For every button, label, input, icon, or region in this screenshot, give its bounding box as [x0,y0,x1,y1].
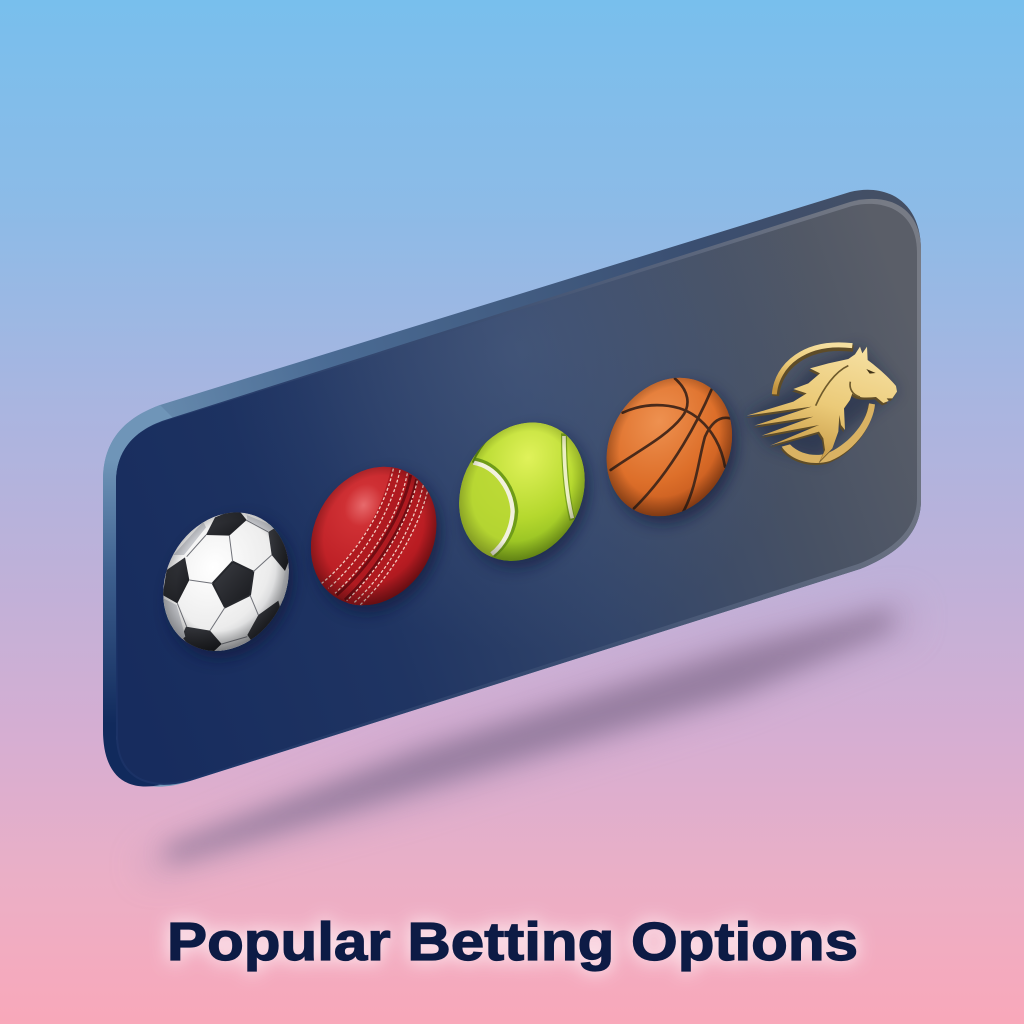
icon: soccer ball [163,512,296,662]
panel face outer highlight [116,199,921,785]
emblem horse eye [866,369,876,374]
tennis ball body [459,422,585,561]
panel left edge [103,405,175,787]
cricket ball body [310,466,436,606]
icon: basketball [606,367,737,534]
panel face sheen [116,204,917,783]
panel cast shadow [140,600,910,875]
emblem horse [747,347,897,461]
panel edge [103,190,921,787]
basketball body [606,378,732,516]
panel: tilted navy board [103,190,921,787]
cricket shadow [315,463,441,623]
soccer shadow [168,509,294,669]
icon: cricket ball [311,456,441,623]
emblem ring bottom [781,405,874,465]
emblem shadow [747,347,897,461]
emblem horse shadow [745,349,896,463]
emblem creases [816,366,860,406]
title glow: Popular Betting Options [167,912,858,972]
icon: tennis ball [454,412,590,579]
soccer ball body [163,512,289,651]
title: Popular Betting Options [167,912,858,972]
panel face [116,204,917,783]
emblem ring top [776,347,853,396]
basketball shadow [611,374,737,534]
icon: gold horse emblem [745,345,897,465]
tennis shadow [464,419,590,579]
